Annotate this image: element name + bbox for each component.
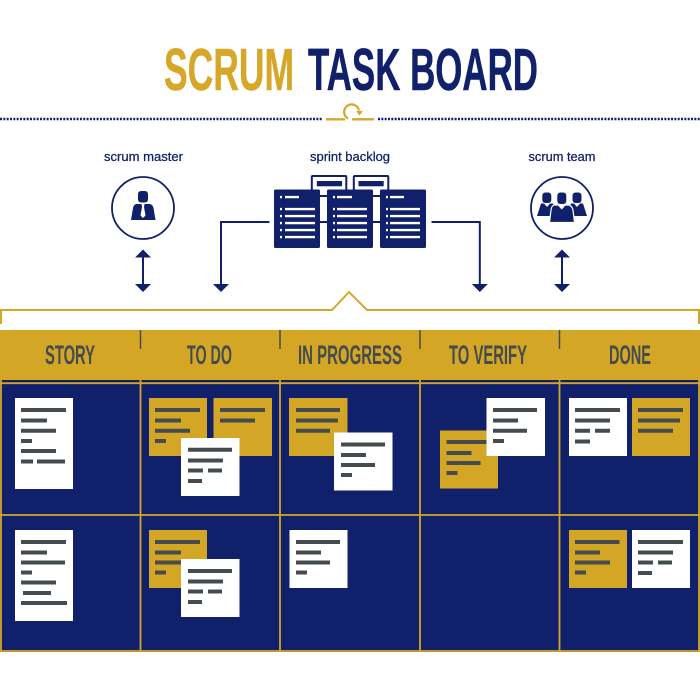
icon: scrum master bbox=[112, 177, 174, 239]
label: scrum master: scrum master bbox=[104, 150, 183, 164]
title: TASK BOARD bbox=[308, 37, 538, 103]
column heading: done: DONE bbox=[609, 340, 651, 370]
card: to do gold 2 bbox=[214, 398, 272, 456]
board grid bbox=[0, 380, 700, 652]
icon: sprint backlog documents bbox=[274, 176, 426, 248]
icon: scrum team bbox=[531, 177, 593, 239]
card: to verify gold bbox=[440, 430, 498, 488]
column heading: to do: TO DO bbox=[187, 340, 232, 370]
card: to do white bbox=[181, 438, 240, 496]
title divider with cycle icon bbox=[0, 104, 700, 119]
arrow: scrum master two-way bbox=[135, 250, 151, 292]
bracket connecting backlog to board bbox=[1, 292, 699, 324]
card: done white bbox=[569, 398, 627, 456]
label: sprint backlog: sprint backlog bbox=[310, 150, 390, 164]
column heading: in progress: IN PROGRESS bbox=[298, 340, 402, 370]
card: in progress white bbox=[334, 432, 392, 490]
card: story row 1 bbox=[15, 398, 73, 489]
arrow: backlog to to-do bbox=[213, 222, 270, 292]
card: to do white row 2 bbox=[181, 559, 240, 617]
card: story row 2 bbox=[15, 530, 73, 621]
label: scrum team: scrum team bbox=[528, 150, 596, 164]
board header row bbox=[0, 330, 700, 380]
card: in progress gold bbox=[289, 398, 348, 456]
card: to do gold row 2 bbox=[149, 530, 207, 588]
card: to verify white bbox=[486, 398, 545, 456]
card: done gold row 2 bbox=[569, 530, 627, 588]
card: done gold bbox=[632, 398, 690, 456]
card: done white row 2 bbox=[632, 530, 690, 588]
arrow: backlog to to-verify bbox=[432, 222, 488, 292]
column heading: to verify: TO VERIFY bbox=[449, 340, 527, 370]
column heading: story: STORY bbox=[45, 340, 95, 370]
title: SCRUM bbox=[164, 37, 294, 103]
card: in progress white row 2 bbox=[290, 530, 348, 588]
title bbox=[164, 37, 538, 103]
arrow: scrum team two-way bbox=[554, 250, 570, 292]
card: to do gold 1 bbox=[149, 398, 207, 456]
